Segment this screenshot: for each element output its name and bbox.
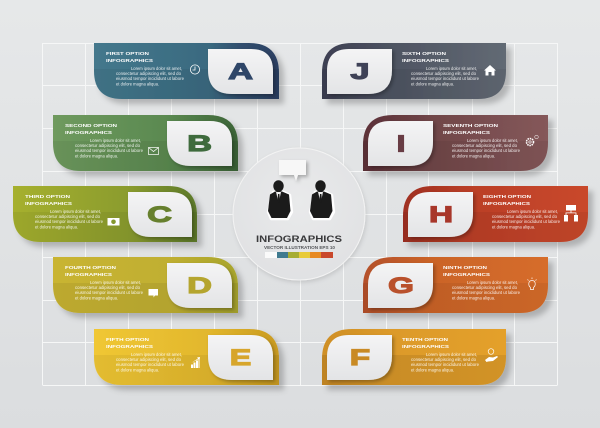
panel: option H: EIGHTH OPTION [483,194,532,200]
panel: center circle [233,148,365,280]
panel: option B: consectetur adipiscing elit, sed do [75,143,140,148]
panel: option G: G [388,273,414,298]
panel: option B: SECOND OPTION [65,123,118,129]
panel: option B: eiusmod tempor incididunt ut labore [75,148,143,153]
panel: option J: J [351,60,369,84]
panel: option G: consectetur adipiscing elit, sed do [452,285,517,290]
panel: option F: F [350,345,370,370]
subheading: VECTOR ILLUSTRATION EPS 10 [264,245,336,250]
panel: option G: NINTH OPTION [443,265,488,271]
heading: INFOGRAPHICS [256,234,342,245]
panel: option A: INFOGRAPHICS [106,58,154,64]
panel: option A: et dolore magna aliqua. [116,82,159,86]
panel: option I: INFOGRAPHICS [443,130,491,136]
panel: option H: et dolore magna aliqua. [492,224,535,230]
panel: option A: consectetur adipiscing elit, sed do [116,71,181,76]
panel: option E [94,329,279,385]
panel: option C: THIRD OPTION [25,194,71,200]
panel: option E: FIFTH OPTION [106,337,150,343]
panel: option H: INFOGRAPHICS [483,201,531,207]
icon: speech bubble [279,160,306,181]
panel: option B [53,115,238,171]
panel: option F: consectetur adipiscing elit, sed do [411,357,476,362]
panel: option D: et dolore magna aliqua. [75,296,118,300]
panel: option D: consectetur adipiscing elit, sed do [75,285,140,290]
panel: option E: E [230,345,251,370]
panel: option H: eiusmod tempor incididunt ut labore [492,219,560,224]
panel: option I: consectetur adipiscing elit, sed do [452,143,517,148]
panel: option H: consectetur adipiscing elit, sed do [492,214,557,219]
panel: option A: Lorem ipsum dolor sit amet, [131,66,182,71]
panel: option C: Lorem ipsum dolor sit amet, [50,209,101,214]
panel: option F: TENTH OPTION [402,337,449,343]
panel: option G: eiusmod tempor incididunt ut labore [452,290,520,295]
color bar [265,252,333,258]
panel: option J [322,43,506,99]
panel: option J: Lorem ipsum dolor sit amet, [426,66,477,71]
panel: option A: eiusmod tempor incididunt ut labore [116,76,184,81]
panel: option G: Lorem ipsum dolor sit amet, [467,280,518,285]
panel: option A: A [228,60,253,84]
panel: option A [94,43,279,99]
panel: option J: et dolore magna aliqua. [411,82,454,86]
panel: option D: INFOGRAPHICS [65,272,113,278]
panel: option G [363,257,548,313]
panel: option D: FOURTH OPTION [65,265,117,271]
panel: option I: et dolore magna aliqua. [452,154,495,158]
panel: option E: consectetur adipiscing elit, sed do [116,357,181,362]
panel: option B: Lorem ipsum dolor sit amet, [90,138,141,143]
panel: option F: eiusmod tempor incididunt ut labore [411,362,479,367]
panel: option F: Lorem ipsum dolor sit amet, [426,352,477,357]
panel: option C: consectetur adipiscing elit, sed do [35,214,100,219]
panel: option A: FIRST OPTION [106,51,150,57]
panel: option J: INFOGRAPHICS [402,58,450,64]
panel: option I: I [397,130,405,157]
panel: option B: INFOGRAPHICS [65,130,113,136]
panel: option C: C [147,203,172,227]
panel: option D: Lorem ipsum dolor sit amet, [90,280,141,285]
panel: option J: consectetur adipiscing elit, sed do [411,71,476,76]
panel: option C: INFOGRAPHICS [25,201,73,207]
panel: option I: Lorem ipsum dolor sit amet, [467,138,518,143]
panel: option C: eiusmod tempor incididunt ut labore [35,219,103,224]
panel: option C: et dolore magna aliqua. [35,224,78,230]
panel: option F: INFOGRAPHICS [402,344,450,350]
panel: option H: H [429,202,453,227]
panel: option D [53,257,238,313]
panel: option J: SIXTH OPTION [402,51,447,57]
panel: option B: B [187,132,212,156]
panel: option G: INFOGRAPHICS [443,272,491,278]
panel: option I: eiusmod tempor incididunt ut labore [452,148,520,153]
icon: businessman left [268,180,292,219]
icon: businessman right [310,180,334,219]
panel: option F: et dolore magna aliqua. [411,368,454,372]
panel: option B: et dolore magna aliqua. [75,154,118,158]
panel: option E: eiusmod tempor incididunt ut labore [116,362,184,367]
panel: option D: D [187,274,212,298]
panel: option E: Lorem ipsum dolor sit amet, [131,352,182,357]
panel: option H: Lorem ipsum dolor sit amet, [507,209,558,214]
panel: option C [13,186,197,242]
panel: option H [403,186,588,242]
panel: option G: et dolore magna aliqua. [452,296,495,300]
panel: option F [322,329,506,385]
panel: option E: et dolore magna aliqua. [116,368,159,372]
panel: option J: eiusmod tempor incididunt ut labore [411,76,479,81]
panel: option I: SEVENTH OPTION [443,123,499,129]
panel: option I [363,115,548,171]
panel: option E: INFOGRAPHICS [106,344,154,350]
panel: option D: eiusmod tempor incididunt ut labore [75,290,143,295]
